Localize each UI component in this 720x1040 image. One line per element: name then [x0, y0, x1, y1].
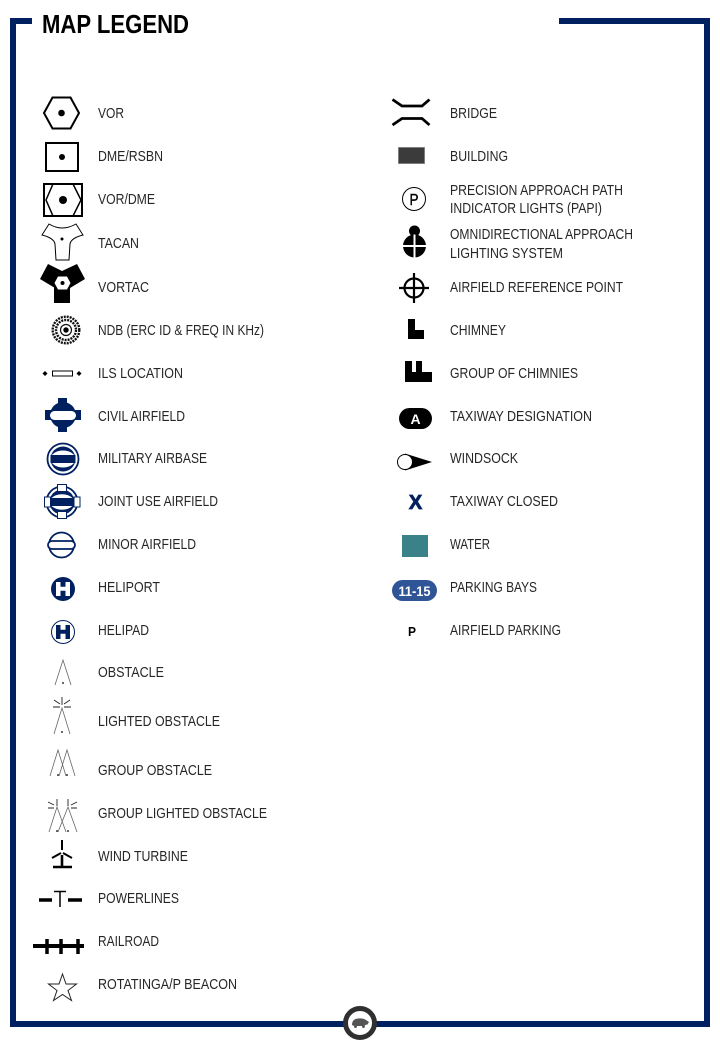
item: Chimney — [408, 319, 506, 339]
item: Military airbase — [48, 444, 207, 474]
label: Airfield parking: AIRFIELD PARKING — [450, 623, 561, 639]
item: Parking bays — [392, 580, 537, 601]
item: Airfield reference point — [399, 273, 623, 303]
label: Obstacle: OBSTACLE — [98, 665, 164, 681]
item: VORTAC — [40, 264, 149, 303]
label: Taxiway closed: TAXIWAY CLOSED — [450, 494, 558, 510]
icon: taxiway closed X: X — [409, 492, 423, 514]
item: Group lighted obstacle — [48, 799, 267, 832]
item: Minor airfield — [48, 532, 196, 558]
icon: group of chimnies — [405, 361, 432, 382]
icon: PAPI: P — [410, 192, 418, 209]
label: Lighted obstacle: LIGHTED OBSTACLE — [98, 714, 220, 730]
label: PAPI second line: INDICATOR LIGHTS (PAPI) — [450, 201, 602, 217]
label: Wind turbine: WIND TURBINE — [98, 849, 188, 865]
item: Wind turbine — [52, 840, 188, 867]
icon: DME square — [46, 143, 78, 171]
label: ILS location: ILS LOCATION — [98, 366, 183, 382]
icon: parking P: P — [408, 624, 416, 639]
label: Parking bays: PARKING BAYS — [450, 580, 537, 596]
icon: parking bays badge — [392, 580, 437, 601]
item: Taxiway designation — [399, 408, 592, 429]
label: Heliport: HELIPORT — [98, 580, 160, 596]
icon: windsock — [398, 454, 432, 470]
item: ILS location — [42, 366, 183, 382]
icon: VORTAC — [40, 264, 85, 303]
icon: heliport — [51, 577, 75, 601]
item: Civil airfield — [45, 398, 185, 432]
icon: TACAN — [42, 224, 83, 260]
label: Joint use airfield: JOINT USE AIRFIELD — [98, 494, 218, 510]
icon: ILS location — [42, 371, 82, 376]
item: Taxiway closed — [409, 492, 558, 514]
icon: PAPI — [402, 188, 426, 210]
item: Water — [402, 535, 490, 557]
item: Bridge — [392, 100, 497, 125]
label: VORTAC: VORTAC — [98, 280, 149, 296]
label: Taxiway designation: TAXIWAY DESIGNATION — [450, 409, 592, 425]
item: Helipad — [52, 620, 149, 644]
item: Heliport — [51, 577, 160, 601]
icon: bridge — [392, 100, 430, 125]
item: Obstacle — [55, 660, 164, 685]
label: PAPI: PRECISION APPROACH PATH — [450, 183, 623, 199]
item: NDB — [53, 317, 264, 343]
label: Minor airfield: MINOR AIRFIELD — [98, 537, 196, 553]
label: DME/RSBN: DME/RSBN — [98, 149, 163, 165]
item: Rotating A/P beacon — [48, 974, 237, 1000]
item: Railroad — [33, 934, 159, 954]
item: Omnidirectional approach lighting — [403, 226, 633, 262]
label: Water: WATER — [450, 537, 490, 553]
label: Group lighted obstacle: GROUP LIGHTED OBSTACLE — [98, 806, 267, 822]
label: Military airbase: MILITARY AIRBASE — [98, 451, 207, 467]
item: TACAN — [42, 224, 139, 260]
item: Lighted obstacle — [53, 697, 220, 734]
item: Airfield parking — [408, 623, 561, 639]
item: Building — [398, 148, 508, 165]
label: Helipad: HELIPAD — [98, 623, 149, 639]
icon: powerlines — [39, 892, 82, 907]
icon: chimney — [408, 319, 424, 339]
icon: civil airfield — [45, 398, 81, 432]
label: Airfield reference point: AIRFIELD REFERENCE POINT — [450, 280, 623, 296]
label: Lighting system: LIGHTING SYSTEM — [450, 246, 563, 262]
item: VOR — [44, 98, 124, 128]
item: Group of chimnies — [405, 361, 578, 382]
label: TACAN: TACAN — [98, 236, 139, 252]
label: VOR/DME: VOR/DME — [98, 192, 155, 208]
label: Omnidirectional approach: OMNIDIRECTIONAL APPROACH — [450, 227, 633, 243]
icon: crosshair — [399, 273, 429, 303]
item: VOR/DME — [44, 184, 155, 216]
icon: minor airfield — [48, 532, 75, 558]
icon: helipad — [52, 620, 74, 644]
icon: parking bays badge: 11-15 — [398, 583, 431, 599]
item: Joint use airfield — [44, 484, 218, 518]
icon: obstacle — [55, 660, 71, 685]
title: MAP LEGEND — [42, 9, 189, 39]
label: Bridge: BRIDGE — [450, 106, 497, 122]
icon: joint use airfield — [44, 484, 80, 518]
item: Powerlines — [39, 891, 179, 907]
label: Group obstacle: GROUP OBSTACLE — [98, 763, 212, 779]
label: Building: BUILDING — [450, 149, 508, 165]
label: Powerlines: POWERLINES — [98, 891, 179, 907]
icon: NDB dotted rings — [53, 317, 79, 343]
icon: group lighted obstacle — [48, 799, 77, 832]
legend column: right — [392, 100, 633, 639]
icon: VOR/DME square and hexagon — [44, 184, 82, 216]
footer logo badge — [346, 1008, 374, 1038]
icon: taxiway designation — [399, 408, 432, 429]
icon: railroad — [33, 939, 84, 954]
label: Chimney: CHIMNEY — [450, 323, 506, 339]
label: VOR: VOR — [98, 106, 124, 122]
item: Group obstacle — [50, 750, 212, 779]
item: DME/RSBN — [46, 143, 163, 171]
icon: lighted obstacle — [53, 697, 71, 734]
label: Railroad: RAILROAD — [98, 934, 159, 950]
icon: military airbase — [48, 444, 78, 474]
item: Windsock — [398, 451, 518, 470]
label: Rotating A/P beacon: ROTATINGA/P BEACON — [98, 977, 237, 993]
label: Windsock: WINDSOCK — [450, 451, 518, 467]
icon: star beacon — [48, 974, 76, 1000]
icon: taxiway designation: A — [410, 411, 421, 427]
label: Group of chimnies: GROUP OF CHIMNIES — [450, 366, 578, 382]
item: PAPI — [402, 183, 623, 217]
icon: water swatch — [402, 535, 428, 557]
icon: wind turbine — [52, 840, 72, 867]
icon: omnidirectional approach lighting — [403, 226, 426, 258]
label: NDB: NDB (ERC ID & FREQ IN KHz) — [98, 323, 264, 339]
icon: building — [398, 148, 424, 164]
icon: VOR hexagon — [44, 98, 79, 128]
label: Civil airfield: CIVIL AIRFIELD — [98, 409, 185, 425]
icon: group obstacle — [50, 750, 75, 776]
legend column: left — [33, 98, 267, 1000]
